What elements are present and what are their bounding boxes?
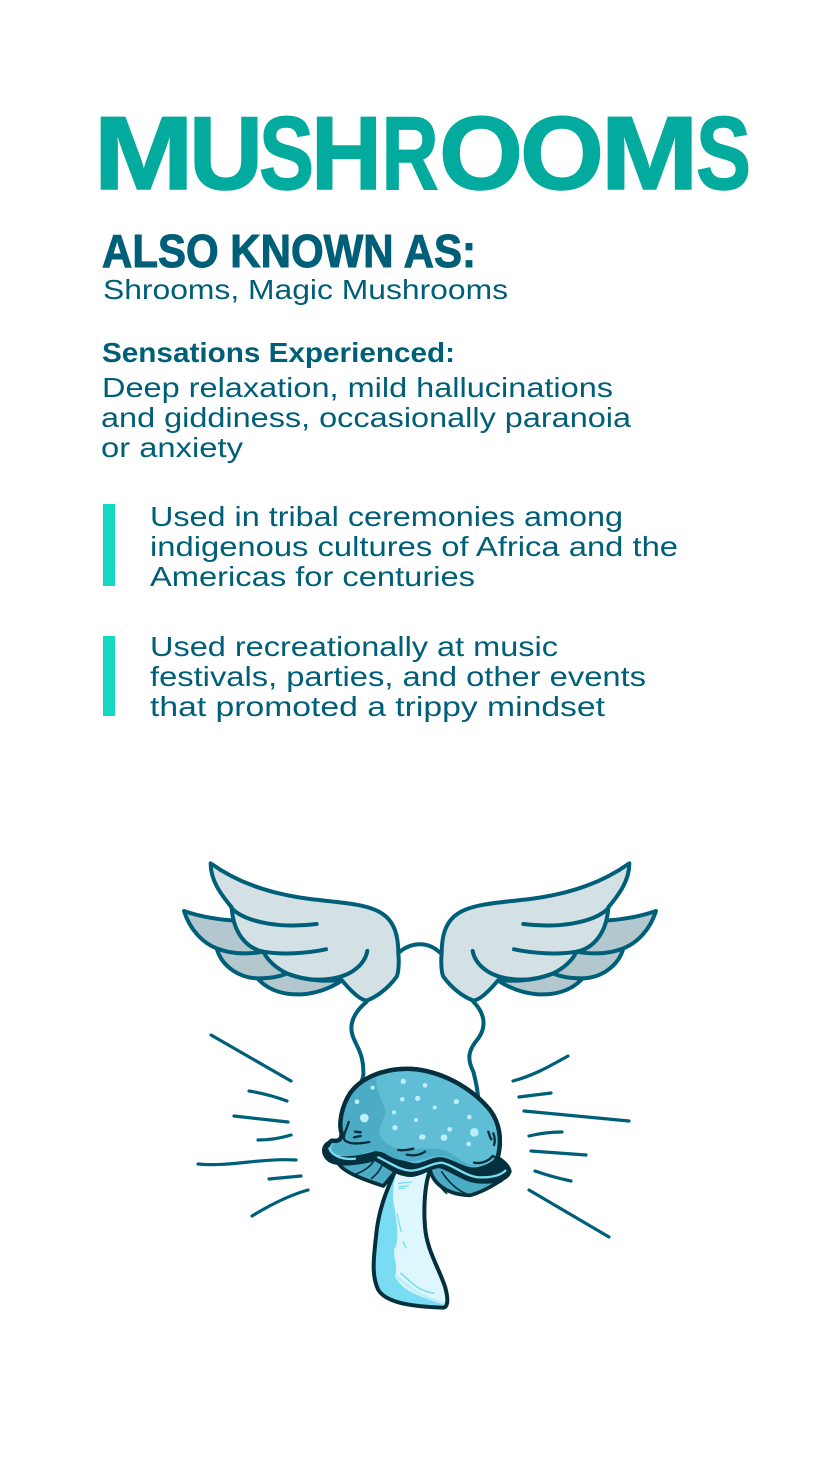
title: H (311, 96, 382, 212)
antennae and bridge (351, 944, 484, 1098)
title: R (382, 96, 439, 212)
bullet: recreational use: Used recreationally at music (150, 631, 558, 662)
bullet: tribal ceremonies: Americas for centuries (150, 561, 475, 592)
text: sensations description: Deep relaxation, mild hallucinations (102, 372, 613, 403)
bullet: tribal ceremonies: Used in tribal ceremonies among (150, 501, 623, 532)
heading: also known as: ALSO KNOWN AS: (102, 225, 476, 277)
bullet: recreational use (103, 631, 646, 722)
mushroom gills (338, 1157, 502, 1195)
bullet: recreational use: that promoted a trippy mindset (150, 691, 605, 722)
icon: radiating lines right (513, 1056, 629, 1237)
heading: sensations experienced: Sensations Experienced: (102, 337, 455, 368)
mushroom cap shading (332, 1077, 480, 1166)
bullet: tribal ceremonies (103, 501, 678, 592)
icon: mushroom (323, 1069, 511, 1308)
bullet: tribal ceremonies: indigenous cultures of Africa and the (150, 531, 678, 562)
left wing (184, 863, 399, 1001)
icon: wings and antennae (184, 863, 656, 1098)
text: sensations description: or anxiety (101, 432, 243, 463)
title: S (696, 96, 751, 212)
title: O (439, 96, 523, 212)
mushroom lip highlights (329, 1148, 505, 1177)
mushroom cap details (332, 1069, 500, 1163)
title: M (94, 96, 194, 212)
text: sensations description (101, 372, 631, 463)
title: S (259, 96, 314, 212)
mushroom cap spots (355, 1079, 479, 1146)
title: U (189, 96, 263, 212)
mushroom cap (327, 1069, 500, 1170)
text: sensations description: and giddiness, occasionally paranoia (101, 402, 631, 433)
icon: radiating lines left (198, 1035, 308, 1216)
right wing (441, 863, 656, 1001)
title: O (520, 96, 604, 212)
mushroom lip (323, 1133, 511, 1183)
mushroom stem (374, 1171, 447, 1308)
bullet: recreational use: festivals, parties, and other events (150, 661, 646, 692)
text: alternate names: Shrooms, Magic Mushrooms (103, 274, 508, 305)
title: M (601, 96, 699, 212)
